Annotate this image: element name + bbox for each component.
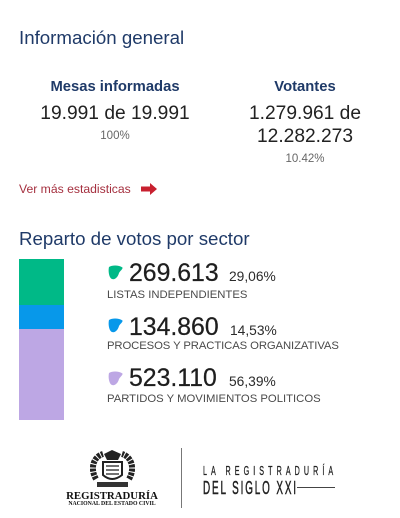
percent: mesas: 100% [100,130,130,142]
value: 269.613 [129,260,219,287]
value: 134.860 [129,314,219,341]
label: mesas: Mesas informadas [50,79,180,95]
percent: 56,39% [229,374,276,389]
name: PARTIDOS Y MOVIMIENTOS POLITICOS [107,393,321,405]
percent: 29,06% [229,269,276,284]
percent: 14,53% [230,323,277,338]
value: votantes: 12.282.273 [257,126,353,147]
icon: coat of arms [90,450,135,487]
entry: partidos [107,365,321,405]
heading: reparto de votos: Reparto de votos por sector [19,228,250,249]
slogan line 2: DEL SIGLO XXI [203,478,298,498]
value: votantes: 1.279.961 de [249,103,361,124]
value: 523.110 [129,365,217,392]
icon: green shape [108,266,122,280]
panel: mesas informadas [40,79,190,142]
slogan: la registraduría del siglo xxi [181,448,337,508]
stacked bar chart [19,259,64,420]
entry: listas independientes [107,260,276,301]
name: PROCESOS Y PRACTICAS ORGANIZATIVAS [107,340,339,352]
icon: blue shape [108,318,122,332]
label: votantes: Votantes [274,79,336,95]
name: LISTAS INDEPENDIENTES [107,289,247,301]
heading: información general: Información general [19,27,184,48]
value: votantes [249,103,361,147]
logo subtitle: NACIONAL DEL ESTADO CIVIL [68,501,156,507]
slogan line 1: LA REGISTRADURÍA [203,463,337,478]
panel: votantes [249,79,361,165]
icon: purple shape [108,372,122,386]
link: ver más estadisticas: Ver más estadisticas [19,182,131,196]
logo name: REGISTRADURÍA [66,490,158,502]
logo: registraduría [66,450,158,507]
percent: votantes: 10.42% [285,153,324,165]
value: mesas: 19.991 de 19.991 [40,103,190,124]
icon: arrow [141,183,157,195]
entry: procesos [107,314,339,352]
